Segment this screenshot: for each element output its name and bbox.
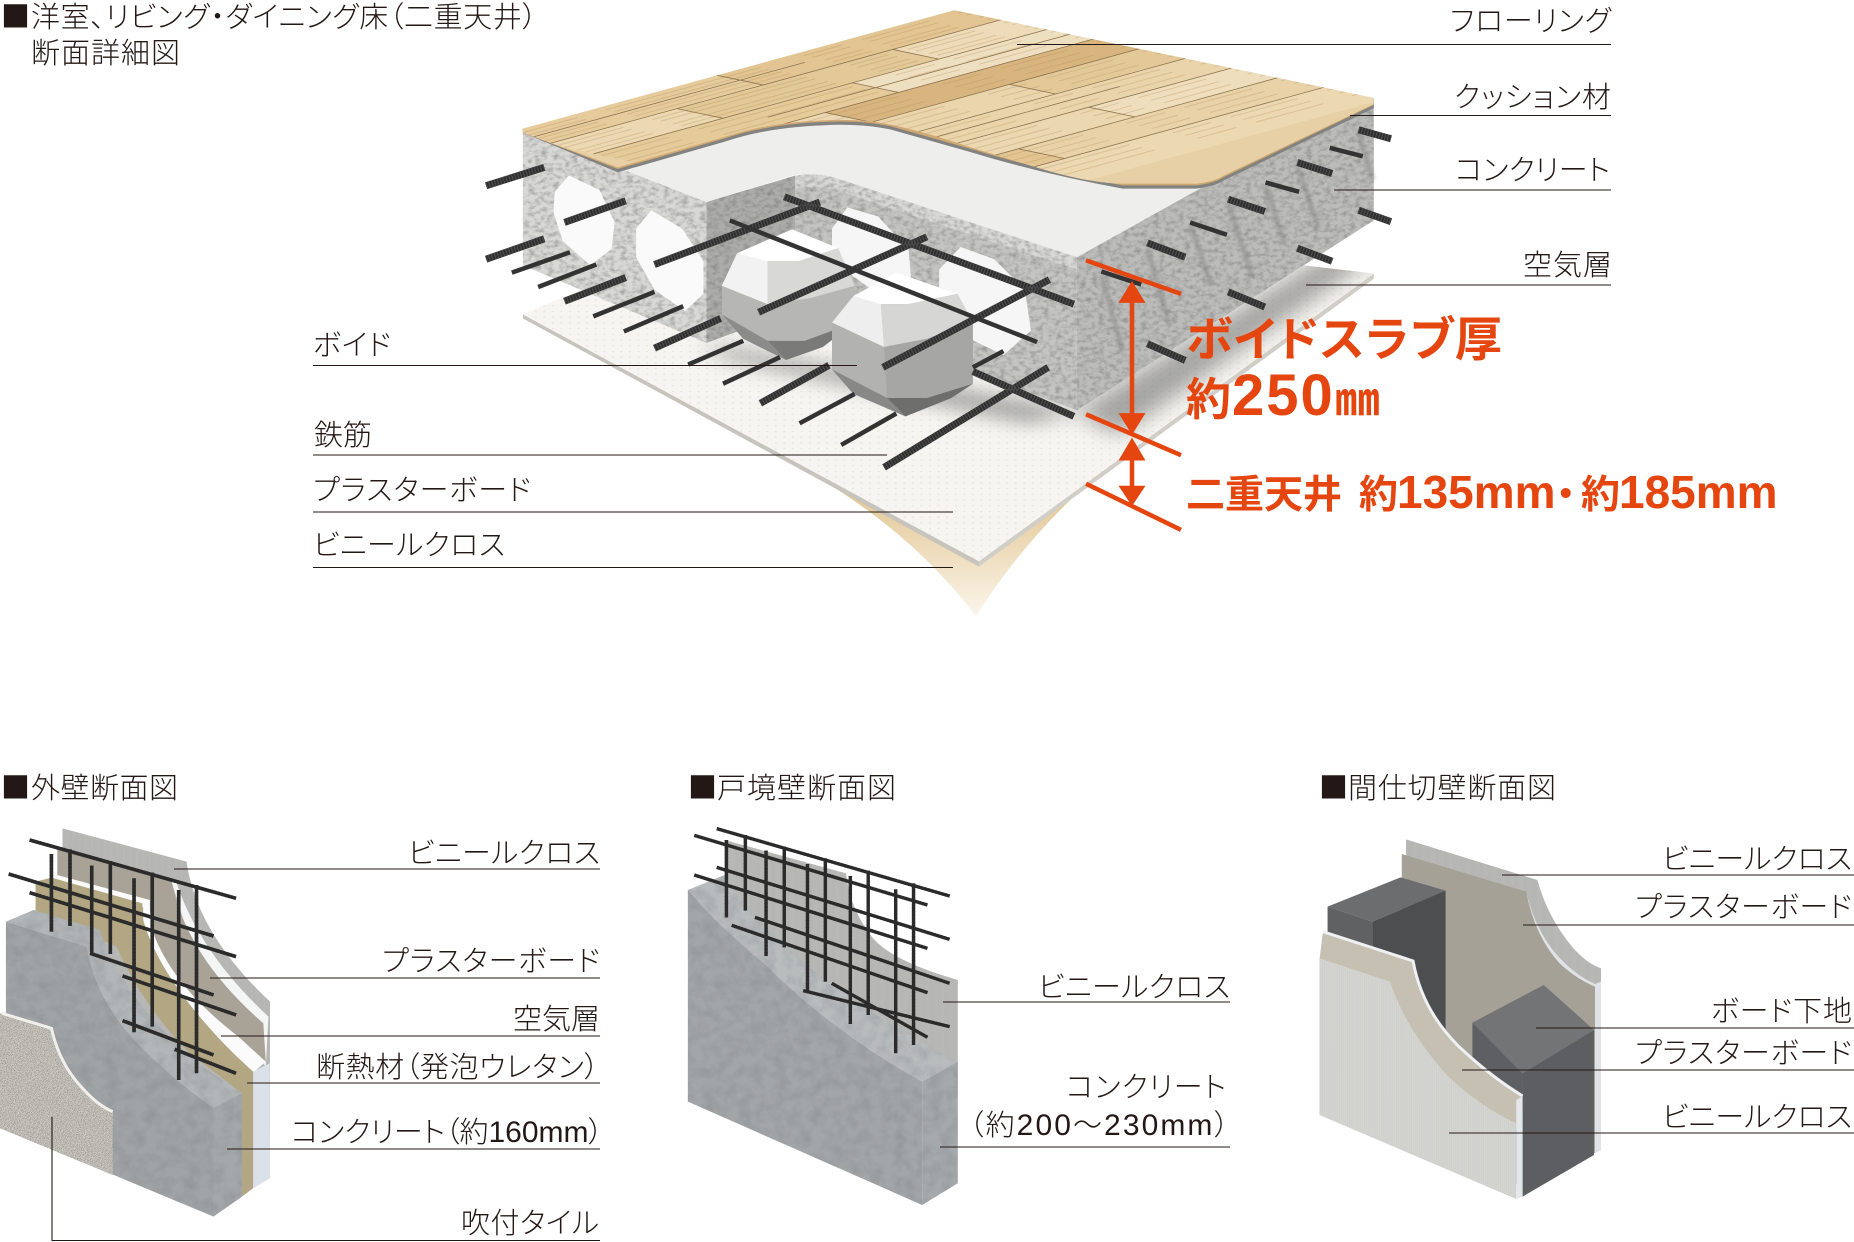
label: vinyl cloth: ビニールクロス: [1038, 972, 1230, 1004]
title: [1, 0, 537, 72]
title: 断面詳細図: [31, 30, 180, 72]
label: air layer: 空気層: [513, 1003, 600, 1036]
label: plaster board: プラスターボード: [382, 946, 600, 978]
callout: double ceiling height: ・: [1556, 474, 1576, 517]
label: board base: ボード下地: [1711, 995, 1852, 1028]
concrete side: [214, 1093, 242, 1217]
heading: exterior wall: 外壁断面図: [31, 765, 178, 807]
back board edge: [1526, 892, 1601, 1153]
callout: void slab thickness: ボイドスラブ厚: [1186, 301, 1502, 370]
concrete front: [6, 922, 214, 1217]
rebar grid: [486, 130, 1391, 467]
label: concrete: コンクリート: [1455, 155, 1610, 187]
label: concrete 160: コンクリート（約160mm）: [291, 1116, 603, 1149]
front plaster white edge: [1323, 932, 1523, 1096]
callout: void slab thickness: 250: [1232, 363, 1335, 428]
panel: party wall illustration: [688, 829, 958, 1205]
heading: partition wall: 間仕切壁断面図: [1348, 765, 1556, 807]
callout: double ceiling height: 約: [1359, 474, 1398, 517]
rebar shadows on right face: [1101, 133, 1373, 351]
label: concrete 200-230: コンクリート: [1066, 1072, 1226, 1104]
label: void: ボイド: [313, 330, 391, 362]
inner void holes: [832, 207, 1031, 355]
label: vinyl cloth: ビニールクロス: [1662, 844, 1852, 876]
callout: double ceiling height: 約: [1581, 474, 1620, 517]
concrete front: [688, 890, 922, 1205]
vinyl cloth layer: [725, 840, 958, 1067]
front vinyl cloth: [1319, 958, 1516, 1199]
front edge strip: [1516, 1096, 1523, 1199]
cushion layer edge: [523, 98, 1374, 189]
label: concrete 200-230: （約200〜230mm）: [969, 1109, 1229, 1142]
concrete left face: [523, 133, 707, 343]
icon: void form 2: [832, 273, 973, 416]
label: insulation: 断熱材（発泡ウレタン）: [316, 1051, 599, 1084]
label: plaster board: プラスターボード: [313, 475, 531, 507]
front plaster board: [1319, 932, 1523, 1130]
panel: floor slab illustration: [485, 10, 1392, 616]
label: cushion material: クッション材: [1454, 81, 1611, 114]
callout: void slab thickness: [1186, 301, 1502, 428]
callout: double ceiling height: 135mm: [1397, 466, 1556, 518]
heading: party wall: 戸境壁断面図: [717, 765, 896, 807]
label: plaster board: プラスターボード: [1635, 1038, 1852, 1070]
concrete cut surface: [6, 910, 242, 1108]
callout: void slab thickness: ㎜: [1335, 374, 1380, 425]
side edge: [253, 1063, 270, 1188]
vinyl cloth layer: [62, 828, 270, 1188]
concrete side: [922, 1062, 958, 1205]
concrete inner faces: [707, 174, 1077, 410]
back plaster board: [1402, 854, 1595, 1153]
tile white rim: [2, 1013, 113, 1112]
label: vinyl cloth: ビニールクロス: [313, 530, 505, 562]
concrete cut surface: [688, 875, 958, 1082]
callout: void slab thickness: 約: [1186, 374, 1231, 425]
air layer white band: [53, 874, 266, 1073]
label: flooring: フローリング: [1450, 6, 1612, 38]
heading: partition wall: ■: [1319, 765, 1348, 807]
flooring planks: [523, 10, 1374, 184]
concrete right face: [1077, 104, 1374, 410]
icon: void form 1: [722, 229, 855, 360]
heading: party wall: ■: [688, 765, 717, 807]
callout: double ceiling height: 185mm: [1619, 466, 1778, 518]
vinyl cloth and plaster board sheet: [522, 265, 1374, 566]
void holes on left face: [553, 176, 703, 311]
rebar mesh: [694, 829, 950, 1053]
label: sprayed tile: [52, 1117, 600, 1240]
outer white strip: [172, 882, 268, 1067]
plaster board layer: [57, 847, 266, 1072]
dimension lines and arrows: [1086, 260, 1181, 530]
insulation layer: [36, 878, 253, 1197]
shadow wedge below board: [774, 453, 1087, 616]
label: sprayed tile: 吹付タイル: [461, 1207, 599, 1240]
panel: partition wall illustration: [1319, 839, 1601, 1199]
back stud: [1328, 877, 1446, 1040]
rebar mesh: [9, 840, 236, 1080]
heading: exterior wall: ■: [1, 765, 30, 807]
panel: exterior wall illustration: [0, 828, 270, 1217]
label: plaster board: プラスターボード: [1635, 892, 1852, 924]
label: air layer: 空気層: [1523, 249, 1612, 282]
label: vinyl cloth: ビニールクロス: [1662, 1102, 1852, 1134]
callout: double ceiling height: 二重天井: [1186, 474, 1342, 517]
label: concrete 200-230: [940, 1072, 1230, 1147]
wood edge: [523, 98, 1374, 185]
label: rebar: 鉄筋: [314, 419, 372, 452]
label: vinyl cloth: ビニールクロス: [408, 838, 600, 870]
sprayed tile: [0, 1013, 113, 1175]
back vinyl cloth: [1406, 839, 1601, 1153]
slab top surface: [618, 120, 1209, 257]
front stud: [1472, 985, 1594, 1197]
